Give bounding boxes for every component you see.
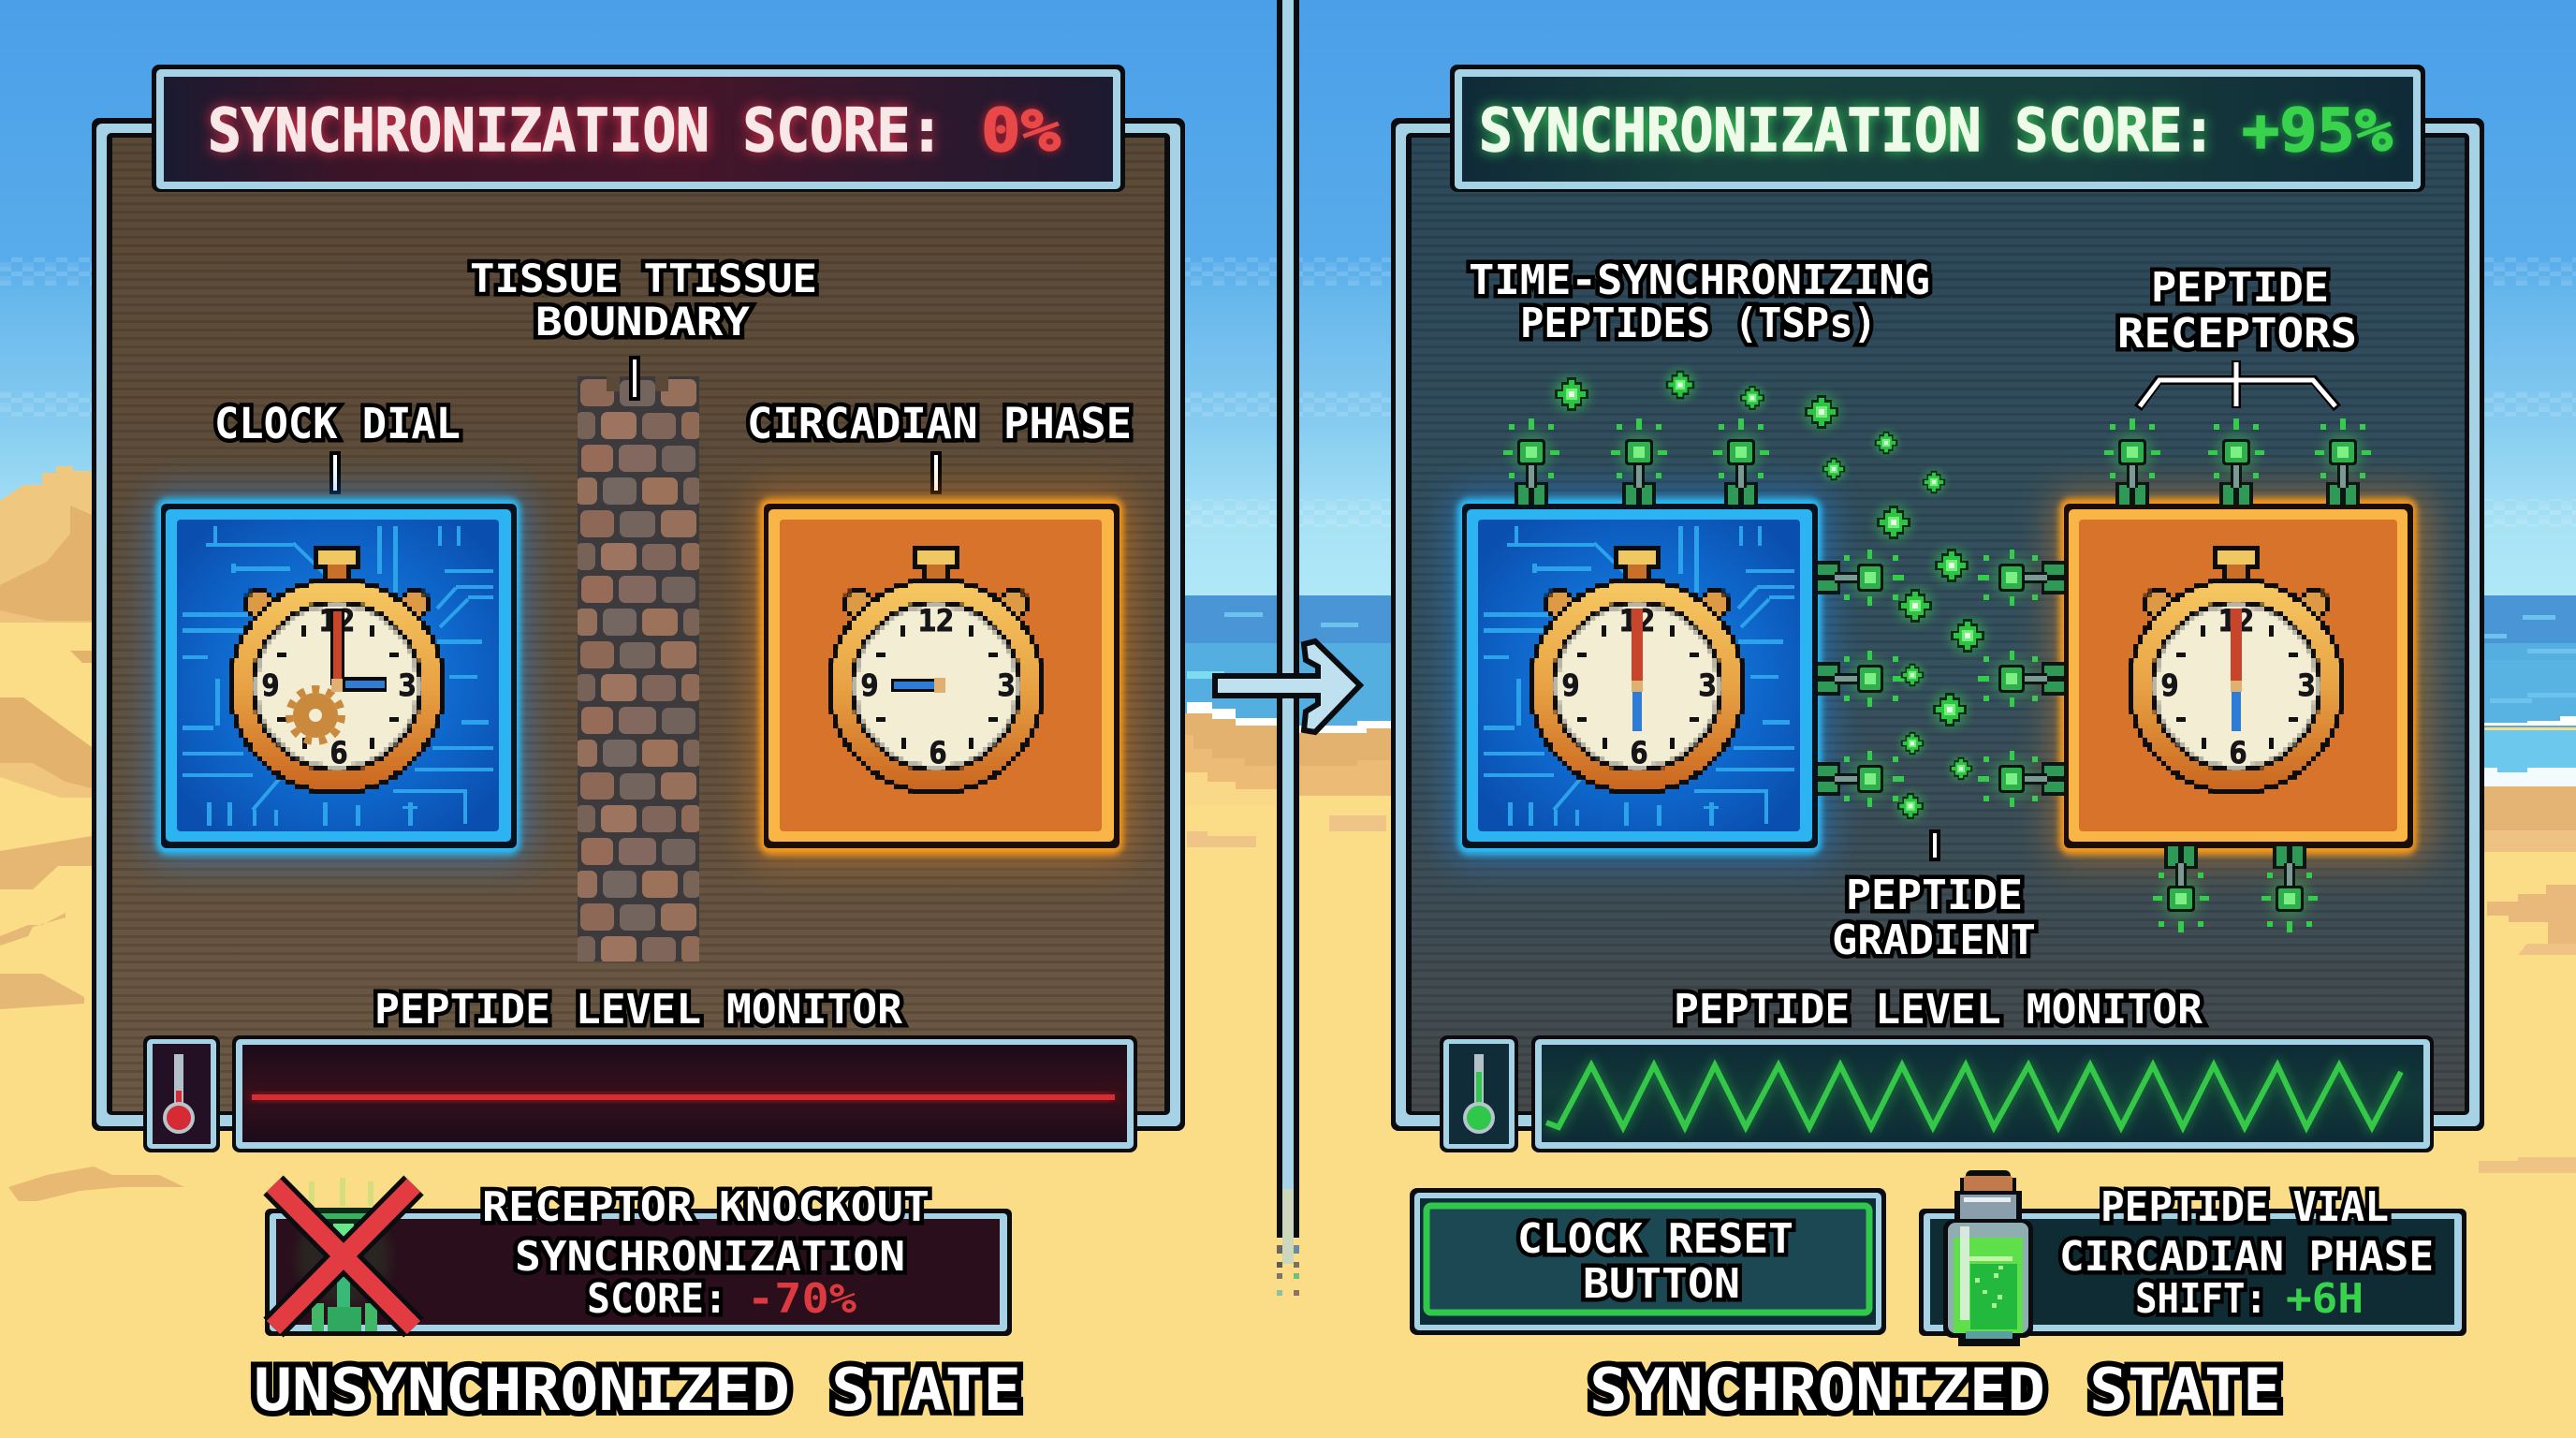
label: peptide receptors <box>2117 264 2357 408</box>
icon: knocked-out receptor <box>297 1178 390 1331</box>
state title: synchronized: STATE <box>2089 1356 2281 1424</box>
label: peptide level monitor left: PEPTIDE LEVEL MONITOR <box>374 986 903 1034</box>
clock: blue tissue: 9 <box>261 668 280 703</box>
clock: orange synchronized: 3 <box>2297 668 2316 703</box>
clock: orange tissue: 9 <box>860 668 879 703</box>
clock: orange synchronized: 9 <box>2160 668 2179 703</box>
clock: orange synchronized: 6 <box>2229 735 2247 770</box>
panel: unsynchronized state <box>92 65 1185 1152</box>
state title: unsynchronized: STATE <box>831 1356 1021 1424</box>
label: peptide gradient <box>1832 831 2036 964</box>
phase shift text: +6H <box>2286 1275 2364 1323</box>
state title: unsynchronized: UNSYNCHRONIZED <box>254 1356 790 1424</box>
clock: blue synchronized: 12 <box>1619 603 1655 638</box>
tissue boundary wall <box>578 358 699 961</box>
label: clock dial: CLOCK DIAL <box>214 399 461 448</box>
clock box: orange tissue, synchronized <box>2053 492 2431 861</box>
chart: green oscillating peptide wave <box>1531 1035 2434 1152</box>
label: tissue boundary <box>470 256 817 345</box>
receptors on orange box <box>1978 418 2371 932</box>
clock: blue synchronized: 6 <box>1630 735 1648 770</box>
clock hands <box>891 678 945 693</box>
clock: orange tissue <box>827 547 1045 795</box>
label: time-synchronizing peptides <box>1469 257 1930 347</box>
clock: orange synchronized: 12 <box>2218 603 2254 638</box>
thermometer: low <box>143 1035 220 1152</box>
label: peptide receptors: RECEPTORS <box>2117 310 2357 358</box>
button: clock reset <box>1410 1188 1886 1335</box>
clock: blue tissue: 3 <box>398 668 417 703</box>
label: time-synchronizing peptides: TIME-SYNCHRONIZING <box>1469 257 1930 304</box>
clock: blue synchronized: 3 <box>1698 668 1717 703</box>
phase shift text: CIRCADIAN PHASE <box>2059 1233 2434 1281</box>
clock box: blue tissue, synchronized <box>1451 492 1829 861</box>
thermometer: high <box>1440 1035 1518 1152</box>
clock: orange tissue: 12 <box>918 603 954 638</box>
clock hands <box>1632 609 1643 731</box>
clock: orange synchronized <box>2128 547 2345 795</box>
clock box: orange tissue <box>753 492 1131 861</box>
divider line <box>1277 0 1299 1296</box>
icon: peptide vial <box>1943 1170 2033 1346</box>
time-synchronizing peptides <box>1555 371 1984 819</box>
gear: broken cog <box>289 689 342 741</box>
clock hands <box>330 609 387 692</box>
label: peptide gradient: GRADIENT <box>1832 917 2036 964</box>
clock: blue synchronized <box>1529 547 1746 795</box>
panel: synchronized state <box>1391 65 2484 1152</box>
panel frame right <box>1391 118 2484 1131</box>
score value right: +95% <box>2242 96 2393 165</box>
clock: orange tissue: 6 <box>929 735 947 770</box>
button: clock reset: BUTTON <box>1583 1260 1740 1308</box>
knockout title: RECEPTOR KNOCKOUT <box>482 1183 929 1231</box>
score label right: SYNCHRONIZATION SCORE: <box>1479 96 2216 165</box>
score header right <box>1450 65 2425 192</box>
state title: synchronized <box>1589 1356 2281 1424</box>
clock: blue synchronized: 9 <box>1561 668 1580 703</box>
label: time-synchronizing peptides: PEPTIDES (TSPs) <box>1520 300 1877 347</box>
state title: synchronized: SYNCHRONIZED <box>1589 1356 2045 1424</box>
knockout score: SYNCHRONIZATION <box>515 1233 905 1281</box>
vial title: PEPTIDE VIAL <box>2100 1183 2389 1231</box>
clock box: blue tissue <box>150 492 528 861</box>
panel frame left <box>92 118 1185 1131</box>
chart: flat red peptide line <box>232 1035 1137 1152</box>
clock: orange tissue: 3 <box>997 668 1016 703</box>
label: peptide gradient: PEPTIDE <box>1846 872 2023 919</box>
phase shift text: SHIFT: <box>2135 1275 2267 1323</box>
label: clock dial <box>214 399 461 492</box>
label: peptide level monitor right: PEPTIDE LEVEL MONITOR <box>1674 986 2203 1034</box>
receptors on blue box <box>1503 418 1904 807</box>
callout: receptor knockout <box>265 1178 1012 1336</box>
label: circadian phase <box>747 399 1132 492</box>
state title: unsynchronized <box>254 1356 1021 1424</box>
button: clock reset: CLOCK RESET <box>1517 1215 1793 1263</box>
label: tissue boundary: BOUNDARY <box>535 299 751 345</box>
label: peptide receptors: PEPTIDE <box>2151 264 2329 312</box>
clock: blue tissue: 12 <box>319 603 355 638</box>
clock: blue tissue: 6 <box>329 735 348 770</box>
score header left <box>152 65 1125 192</box>
label: tissue boundary: TISSUE TTISSUE <box>470 256 817 301</box>
knockout score <box>515 1233 905 1323</box>
icon: red X <box>273 1185 414 1328</box>
label: circadian phase: CIRCADIAN PHASE <box>747 399 1132 448</box>
clock hands <box>2231 609 2242 731</box>
arrow: unsynchronized to synchronized <box>1215 641 1360 732</box>
score value left: 0% <box>981 96 1061 165</box>
knockout score: -70% <box>747 1275 857 1323</box>
callout: peptide vial <box>1919 1170 2466 1346</box>
score label left: SYNCHRONIZATION SCORE: <box>208 96 944 165</box>
knockout score: SCORE: <box>587 1275 727 1323</box>
phase shift text <box>2059 1233 2434 1323</box>
clock: blue tissue <box>228 547 446 795</box>
